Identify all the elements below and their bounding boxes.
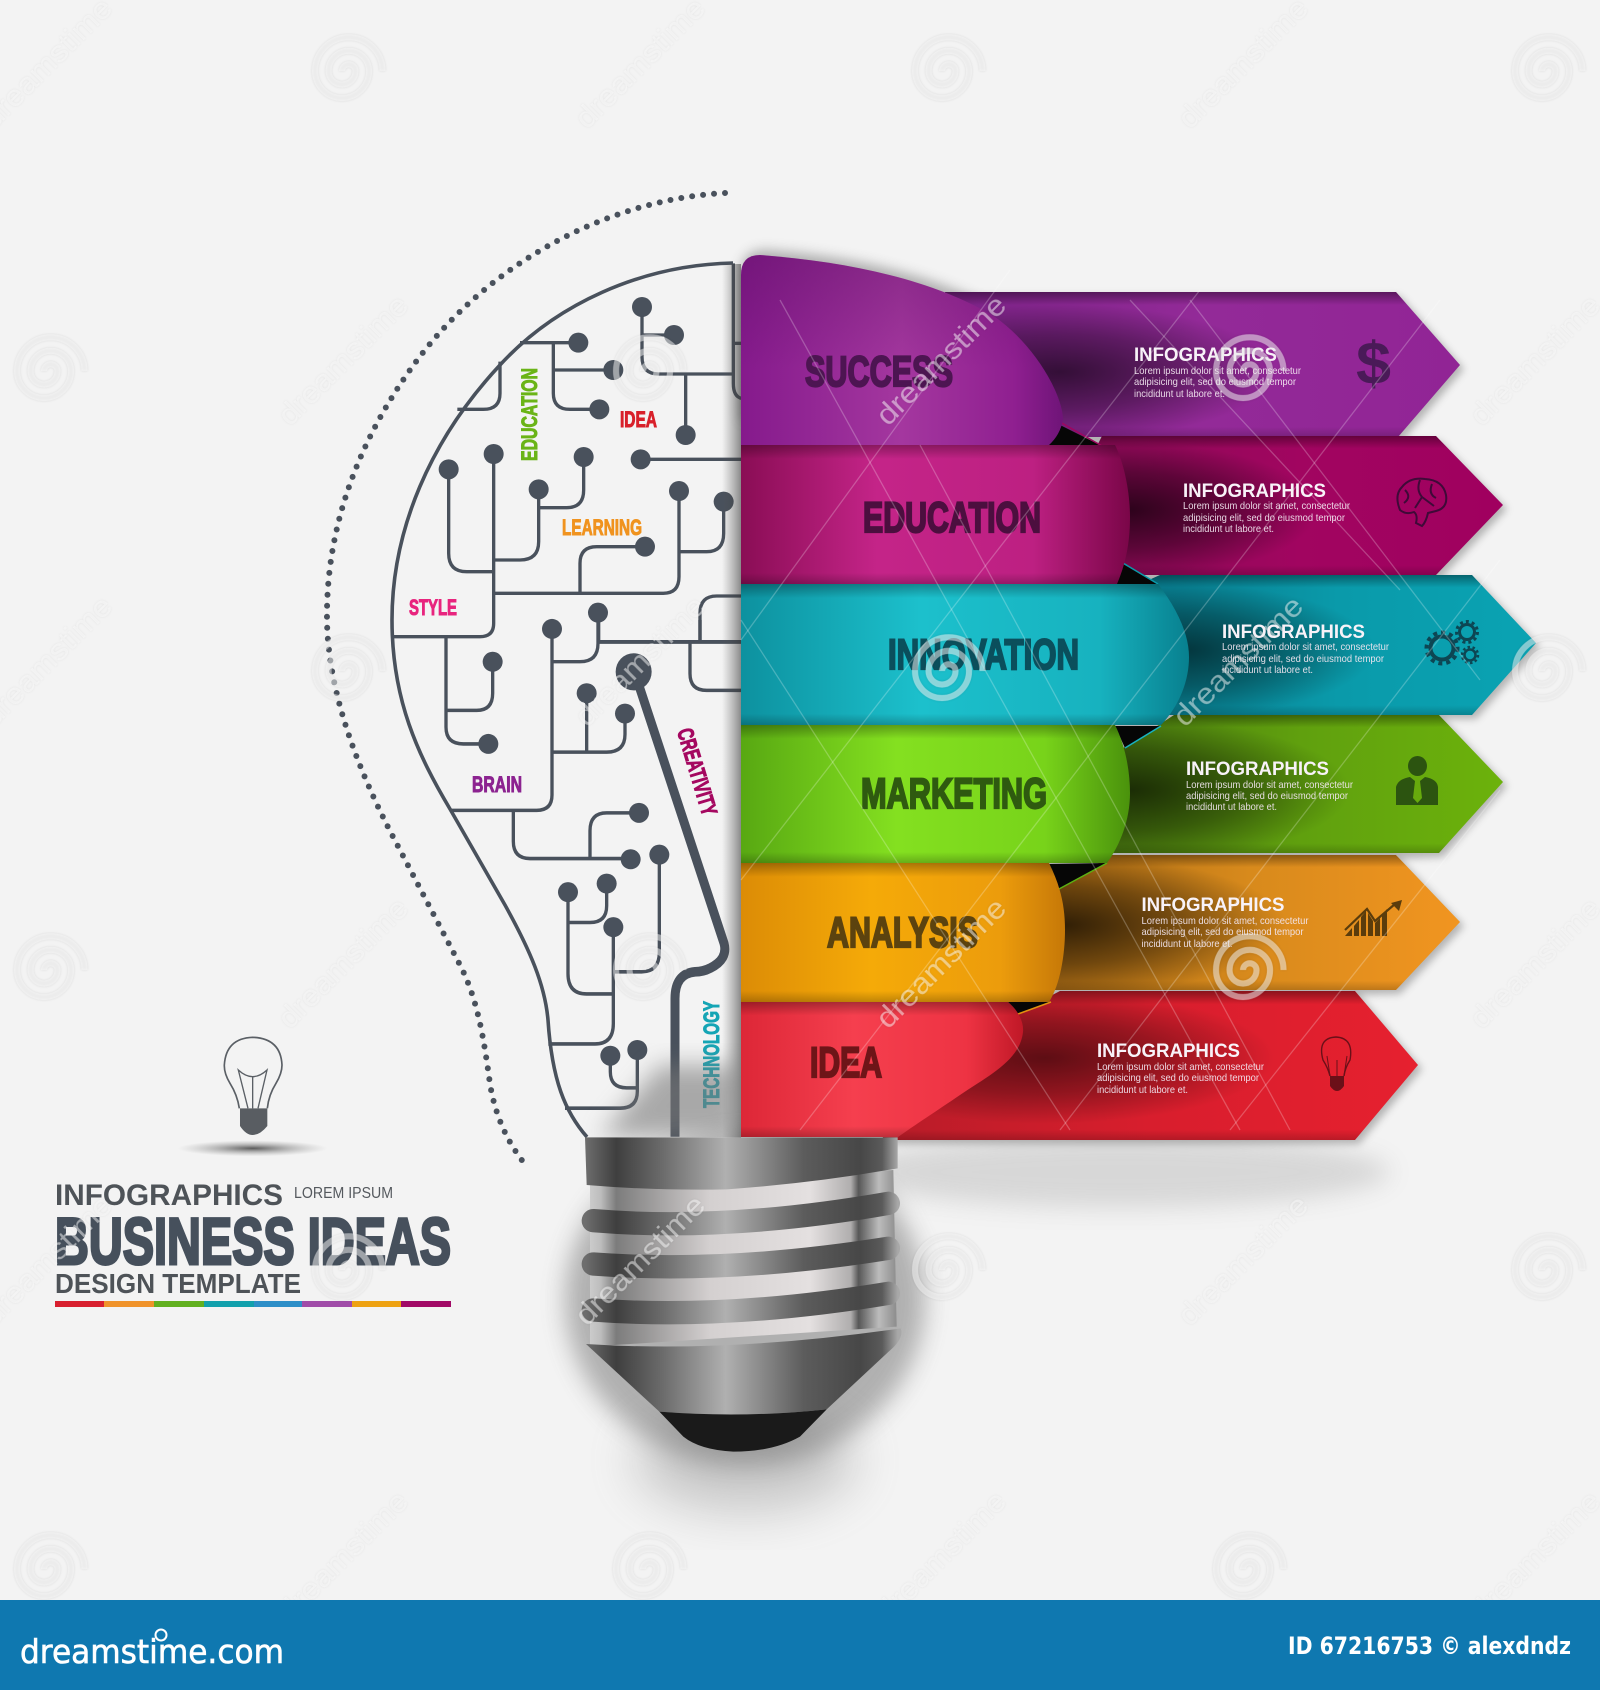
title block (55, 1179, 451, 1307)
arrow 6 text: Lorem ipsum dolor sit amet, consectetur (1097, 1061, 1264, 1073)
arrow 1: purple (945, 292, 1460, 437)
arrow 1 text (1134, 344, 1301, 400)
arrow 6 text: INFOGRAPHICS (1097, 1040, 1240, 1062)
watermark text: dreamstime (569, 590, 712, 733)
arrow 5 text (1142, 894, 1309, 950)
icon: dollar: $ (1356, 330, 1391, 397)
footer logo spiral (156, 1630, 166, 1640)
watermark text: dreamstime (870, 1485, 1013, 1628)
arrow 3 text: adipisicing elit, sed do eiusmod tempor (1222, 653, 1384, 665)
arrow 2 text: incididunt ut labore et. (1183, 523, 1274, 535)
icon: brain (1397, 479, 1446, 526)
bulb screw base (240, 1108, 267, 1135)
title: design template: DESIGN TEMPLATE (55, 1268, 301, 1299)
arrow 2 text (1183, 480, 1350, 535)
arrow 4 text: INFOGRAPHICS (1186, 758, 1329, 780)
arrow 3 text: INFOGRAPHICS (1222, 621, 1365, 643)
band title: success: SUCCESS (805, 348, 953, 396)
icon: gears (1426, 622, 1478, 664)
arrow 1 text: incididunt ut labore et. (1134, 388, 1225, 400)
arrow 4 text (1186, 758, 1353, 813)
shadows behind bands (565, 250, 1540, 1510)
arrow 6 text: adipisicing elit, sed do eiusmod tempor (1097, 1072, 1259, 1084)
band title: innovation: INNOVATION (888, 631, 1079, 679)
arrow 4: green (1114, 715, 1503, 853)
label: education: EDUCATION (517, 368, 542, 461)
lamp socket (585, 1137, 901, 1452)
arrow 1 text: Lorem ipsum dolor sit amet, consectetur (1134, 365, 1301, 377)
arrow 3 text: incididunt ut labore et. (1222, 664, 1313, 676)
arrow 6 text (1097, 1040, 1264, 1096)
bulb filament (238, 1070, 267, 1108)
band: innovation (741, 584, 1189, 725)
watermark text: dreamstime (1464, 892, 1600, 1035)
circuit traces upper (393, 263, 742, 662)
socket tip (659, 1409, 827, 1452)
black wedges between bands (1008, 422, 1161, 1014)
label: learning: LEARNING (562, 515, 642, 540)
band: marketing (741, 725, 1130, 863)
bulb shadow (178, 1140, 328, 1156)
label: style: STYLE (409, 595, 457, 620)
arrow 3 text (1222, 621, 1389, 676)
arrow 6: red (882, 991, 1418, 1140)
dotted arc around bulb (327, 193, 725, 1163)
watermark text: dreamstime (272, 1485, 415, 1628)
arrow 3 text: Lorem ipsum dolor sit amet, consectetur (1222, 641, 1389, 653)
bulb outline (392, 263, 733, 1137)
band title: idea: IDEA (810, 1039, 882, 1087)
arrow 2 text: INFOGRAPHICS (1183, 480, 1326, 502)
band title: education: EDUCATION (863, 494, 1041, 542)
watermark text: dreamstime (272, 892, 415, 1035)
icon: person (1396, 756, 1438, 805)
band: success (741, 255, 1063, 445)
label: idea: IDEA (620, 407, 657, 432)
watermark text: dreamstime (1172, 1189, 1315, 1332)
bulb glass (224, 1037, 282, 1108)
watermark text: dreamstime (1464, 289, 1600, 432)
rainbow rule (55, 1301, 451, 1307)
arrow 3: teal (1151, 575, 1536, 715)
band: analysis (741, 863, 1065, 1002)
thick main trace (635, 674, 725, 1137)
arrow 5: orange (1055, 855, 1460, 990)
subtitle: lorem ipsum: LOREM IPSUM (294, 1185, 393, 1202)
arrow 4 text: incididunt ut labore et. (1186, 801, 1277, 813)
watermark text: dreamstime (569, 0, 712, 135)
arrow 4 text: adipisicing elit, sed do eiusmod tempor (1186, 790, 1348, 802)
icon: light bulb (1322, 1037, 1351, 1091)
icon: rising chart (1345, 900, 1402, 936)
watermark lattice (741, 270, 1500, 1130)
arrow 2 text: adipisicing elit, sed do eiusmod tempor (1183, 512, 1345, 524)
label: creativity: CREATIVITY (672, 725, 722, 819)
arrow 2: magenta (1098, 436, 1503, 575)
title: business ideas: BUSINESS IDEAS (55, 1204, 451, 1278)
arrow 1 text: adipisicing elit, sed do eiusmod tempor (1134, 376, 1296, 388)
arrow 6 text: incididunt ut labore et. (1097, 1084, 1188, 1096)
watermark text: dreamstime (1172, 0, 1315, 135)
watermark text: dreamstime (1167, 590, 1310, 733)
watermark text: dreamstime (569, 1189, 712, 1332)
footer logo: dreamstime.com (20, 1632, 284, 1671)
watermark text: dreamstime (870, 892, 1013, 1035)
arrow 4 text: Lorem ipsum dolor sit amet, consectetur (1186, 779, 1353, 791)
arrow 2 text: Lorem ipsum dolor sit amet, consectetur (1183, 500, 1350, 512)
watermark text: dreamstime (870, 289, 1013, 432)
label: brain: BRAIN (472, 772, 522, 797)
footer bar (0, 1600, 1600, 1690)
bulb circuit half (392, 263, 742, 1137)
small bulb icon (178, 1037, 328, 1156)
title: infographics: INFOGRAPHICS (55, 1179, 283, 1212)
band title: analysis: ANALYSIS (827, 909, 978, 957)
arrow 5 text: adipisicing elit, sed do eiusmod tempor (1142, 926, 1304, 938)
watermark text: dreamstime (1464, 1485, 1600, 1628)
watermark text: dreamstime (272, 289, 415, 432)
arrow 1 text: INFOGRAPHICS (1134, 344, 1277, 366)
circuit traces lower (446, 620, 742, 1108)
band: education (741, 445, 1130, 584)
band title: marketing: MARKETING (861, 770, 1047, 818)
band: idea (741, 1002, 1023, 1137)
arrow 5 text: incididunt ut labore et. (1142, 938, 1232, 950)
circuit nodes lower (478, 619, 669, 1066)
arrow 5 text: INFOGRAPHICS (1142, 894, 1284, 916)
circuit nodes upper (439, 297, 734, 623)
arrow 5 text: Lorem ipsum dolor sit amet, consectetur (1142, 915, 1309, 927)
label: technology: TECHNOLOGY (699, 1001, 724, 1108)
